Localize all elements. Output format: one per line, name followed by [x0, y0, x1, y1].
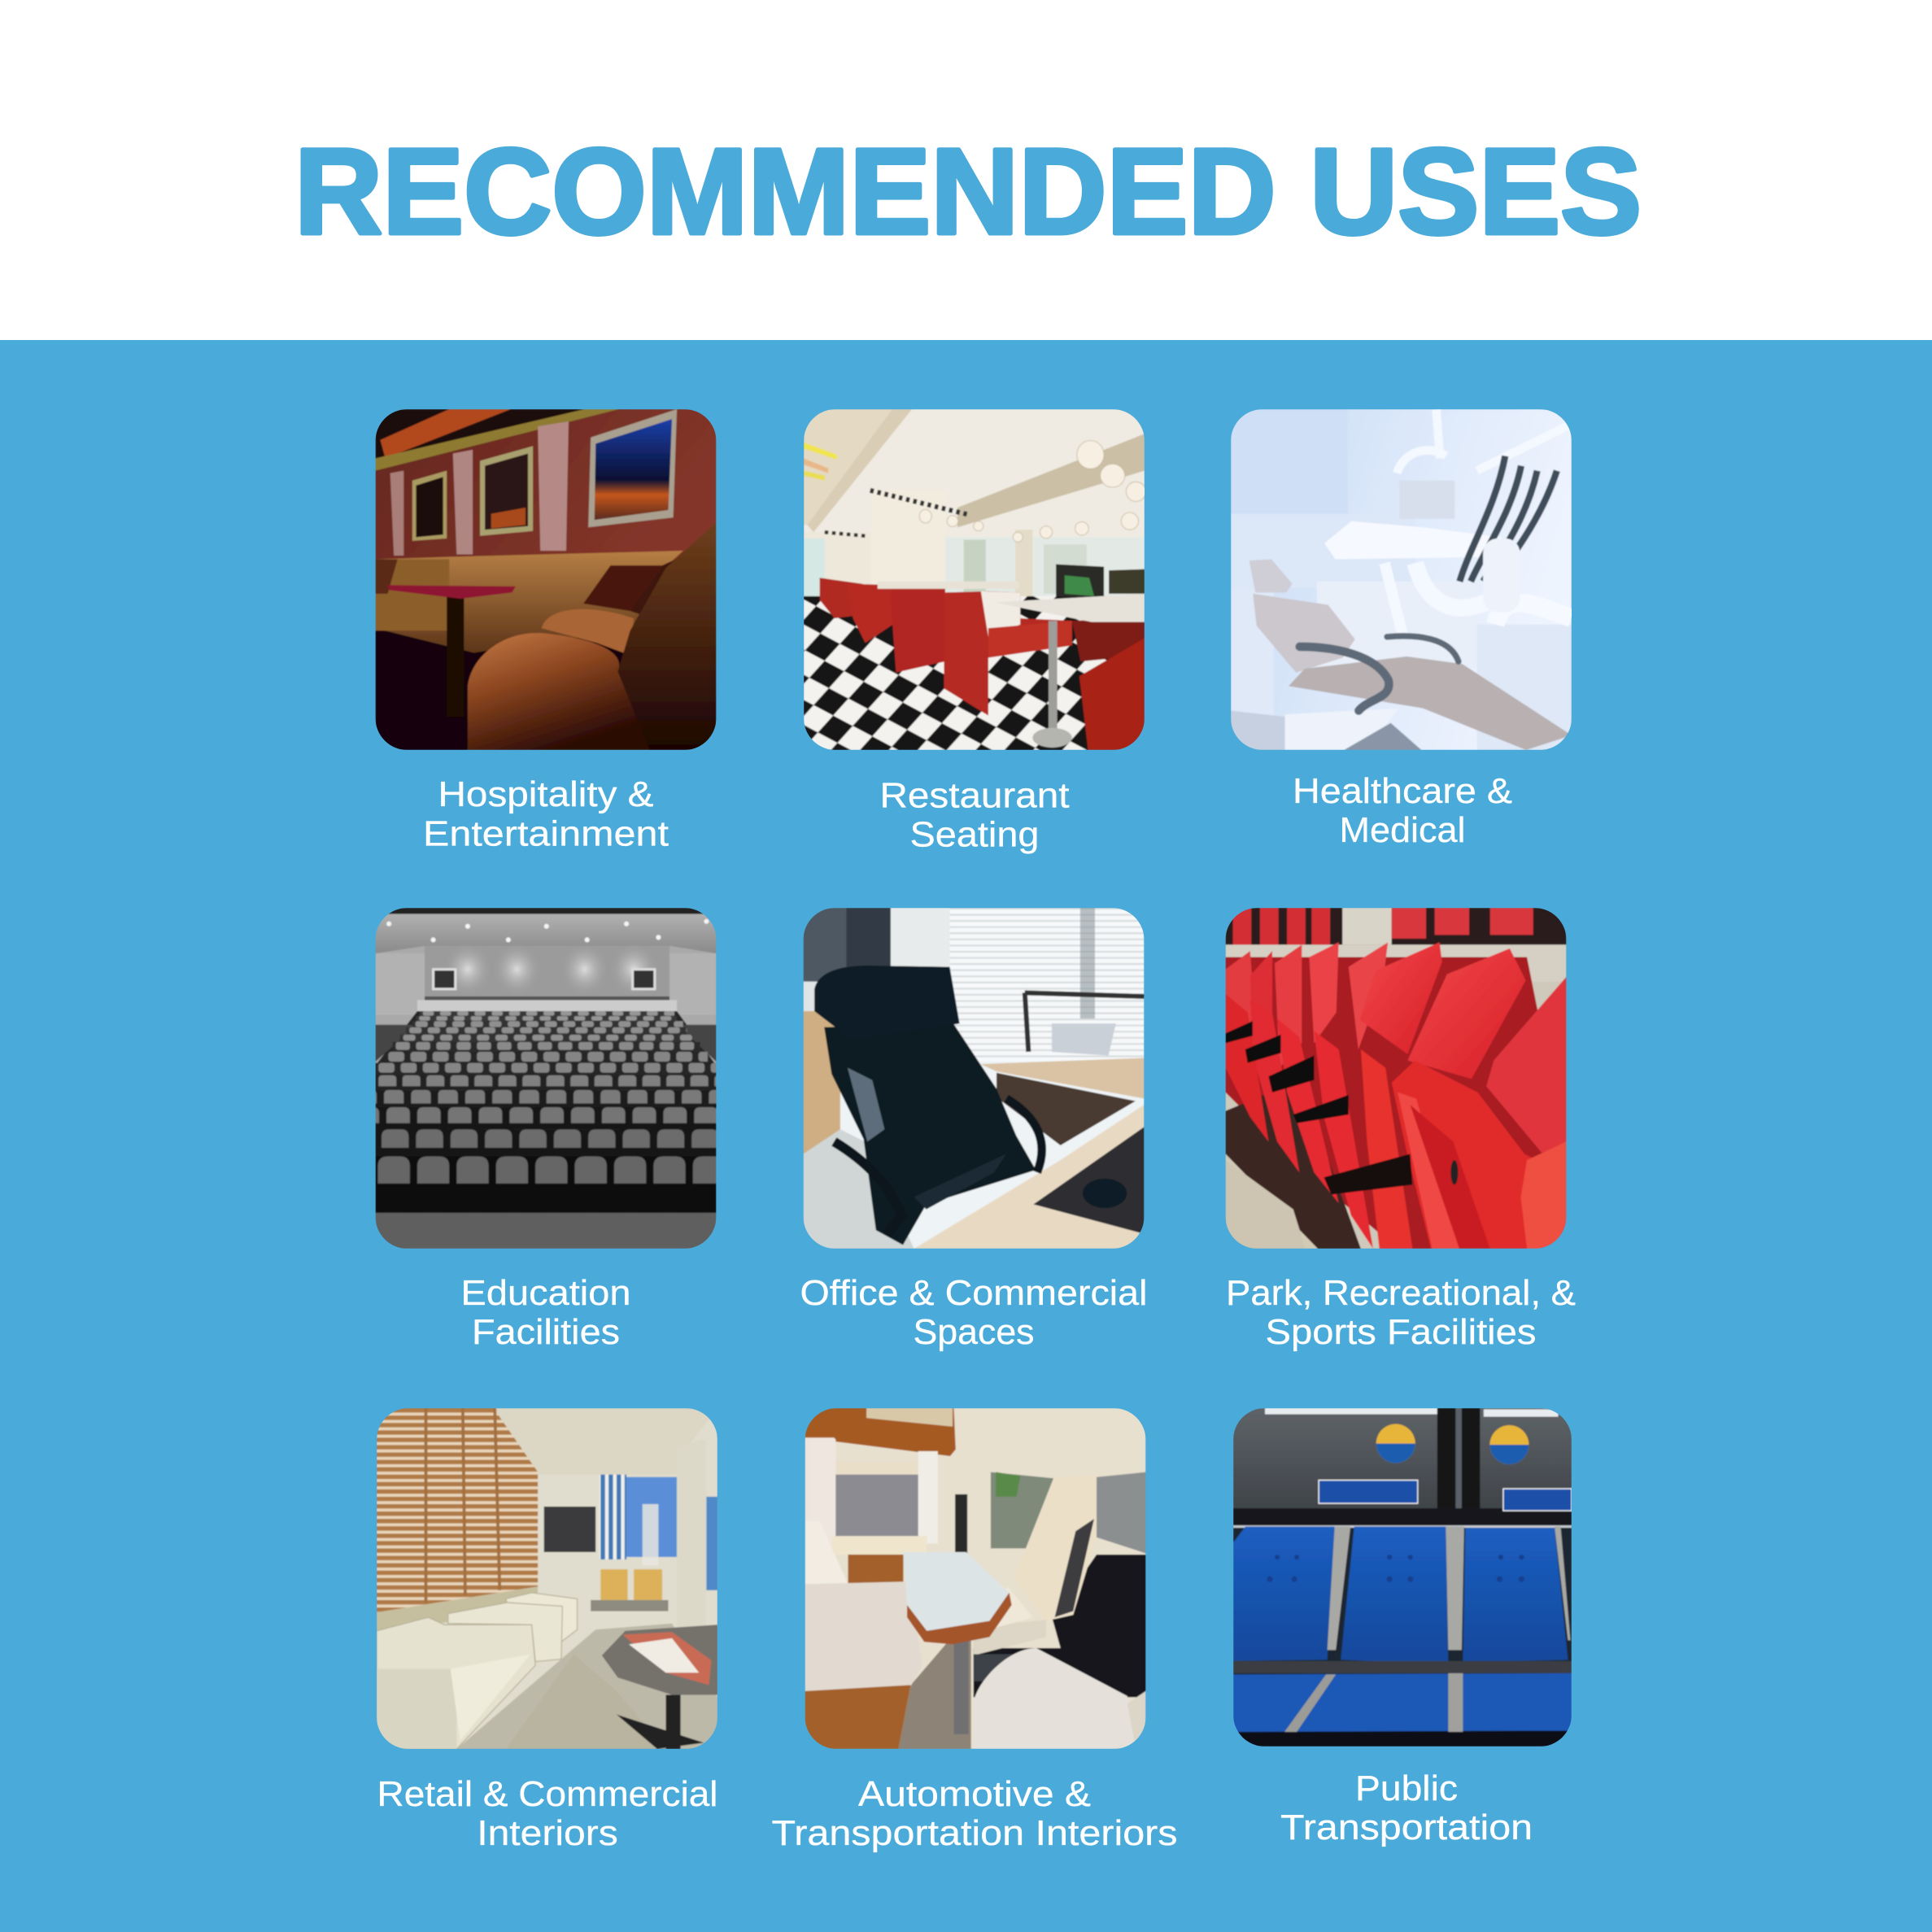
caption: Sports Facilities [1266, 1312, 1536, 1352]
caption [1226, 1273, 1576, 1352]
photo: RV interior [805, 1408, 1145, 1749]
caption: Park, Recreational, & [1226, 1273, 1576, 1313]
card: Healthcare & Medical [1231, 409, 1572, 850]
caption: Facilities [472, 1312, 620, 1352]
caption: Interiors [477, 1813, 618, 1853]
card: Public Transportation [1233, 1408, 1572, 1847]
card: Education Facilities [376, 908, 722, 1352]
caption: Transportation Interiors [771, 1813, 1178, 1853]
title: RECOMMENDED USES [294, 123, 1642, 259]
caption: Seating [909, 815, 1040, 854]
caption [800, 1273, 1147, 1352]
caption [377, 1774, 717, 1853]
photo: red stadium seats [1225, 908, 1567, 1249]
photo: bus seats [1233, 1408, 1572, 1747]
caption: Hospitality & [438, 774, 654, 814]
header background [0, 0, 1932, 340]
caption: Medical [1339, 810, 1466, 850]
photo: auditorium [376, 908, 716, 1249]
photo: diner booths [804, 409, 1145, 750]
card: Hospitality & Entertainment [376, 409, 716, 854]
caption: Public [1355, 1768, 1458, 1808]
photo: dental chair [1231, 409, 1572, 750]
caption [423, 774, 669, 854]
caption: Restaurant [880, 776, 1069, 816]
caption: Spaces [913, 1312, 1035, 1352]
caption: Transportation [1280, 1808, 1533, 1847]
caption [880, 776, 1069, 854]
caption: Entertainment [423, 814, 669, 854]
card: Restaurant Seating [804, 409, 1146, 854]
caption: Retail & Commercial [377, 1774, 717, 1814]
photo: office chair [804, 908, 1144, 1249]
caption: Office & Commercial [800, 1273, 1147, 1313]
caption: Education [460, 1273, 631, 1313]
caption [771, 1774, 1178, 1853]
card: Automotive & Transportation Interiors [771, 1408, 1178, 1853]
caption [1293, 771, 1512, 850]
caption: Healthcare & [1293, 771, 1512, 811]
caption: Automotive & [858, 1774, 1091, 1814]
card: Office & Commercial Spaces [800, 908, 1147, 1352]
caption [1280, 1768, 1533, 1847]
card: Retail & Commercial Interiors [377, 1408, 717, 1853]
photo: lounge booth [376, 409, 716, 750]
photo: waiting room [377, 1408, 717, 1749]
caption [460, 1273, 631, 1352]
card: Park, Recreational, & Sports Facilities [1225, 908, 1576, 1352]
